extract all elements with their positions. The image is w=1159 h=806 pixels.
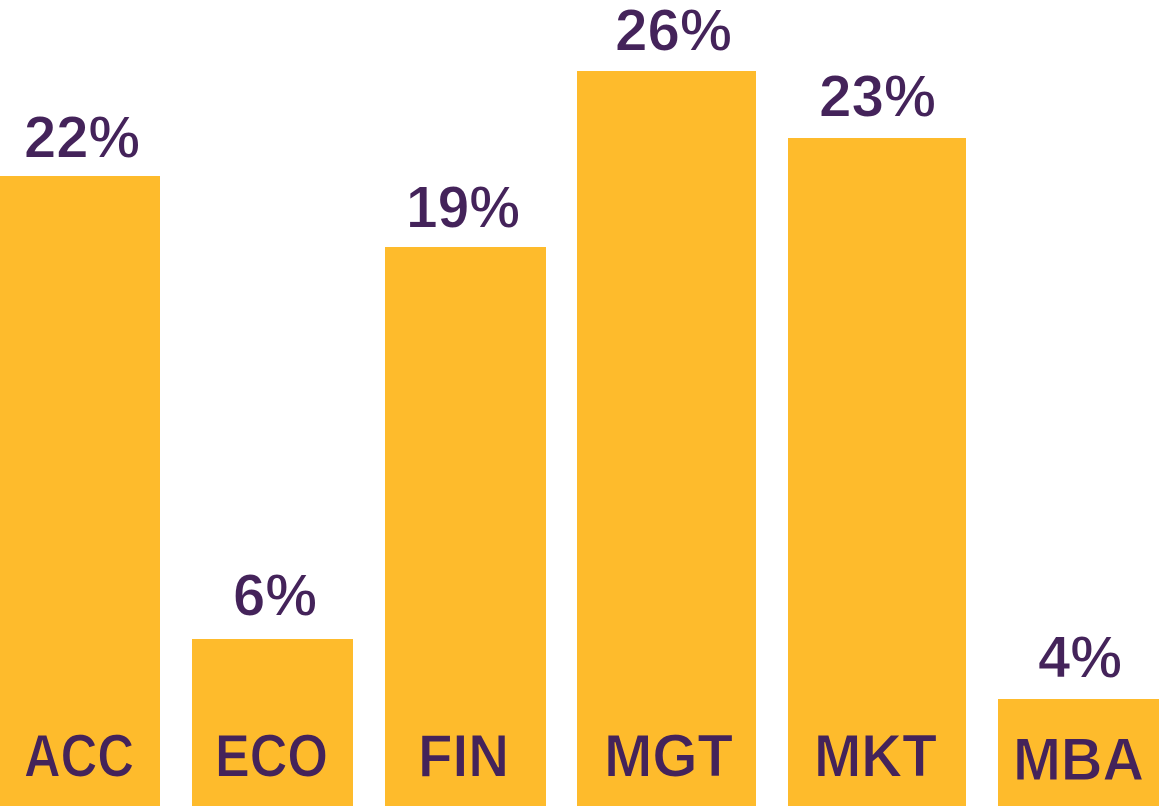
bar: ACC 22%: ACC: [24, 722, 134, 790]
bar: ECO 6%: [192, 562, 353, 806]
bar: FIN 19%: 19%: [406, 174, 520, 240]
bar: FIN 19%: FIN: [418, 722, 509, 790]
bar: MBA 4%: 4%: [1038, 624, 1122, 690]
bar: MGT 26%: [577, 0, 756, 806]
bar: MKT 23%: MKT: [814, 722, 937, 790]
bar: ECO 6%: 6%: [233, 562, 317, 628]
bar: FIN 19%: [385, 174, 546, 806]
bar: ACC 22%: 22%: [24, 104, 140, 170]
bar: MBA 4%: MBA: [1013, 726, 1144, 793]
bar: MGT 26%: MGT: [604, 722, 733, 790]
bar: ACC 22%: [0, 104, 160, 806]
bar: MKT 23%: [788, 64, 966, 806]
bar: ECO 6%: ECO: [215, 722, 328, 790]
bar: MBA 4%: [998, 624, 1159, 806]
bar: MKT 23%: 23%: [819, 64, 936, 130]
